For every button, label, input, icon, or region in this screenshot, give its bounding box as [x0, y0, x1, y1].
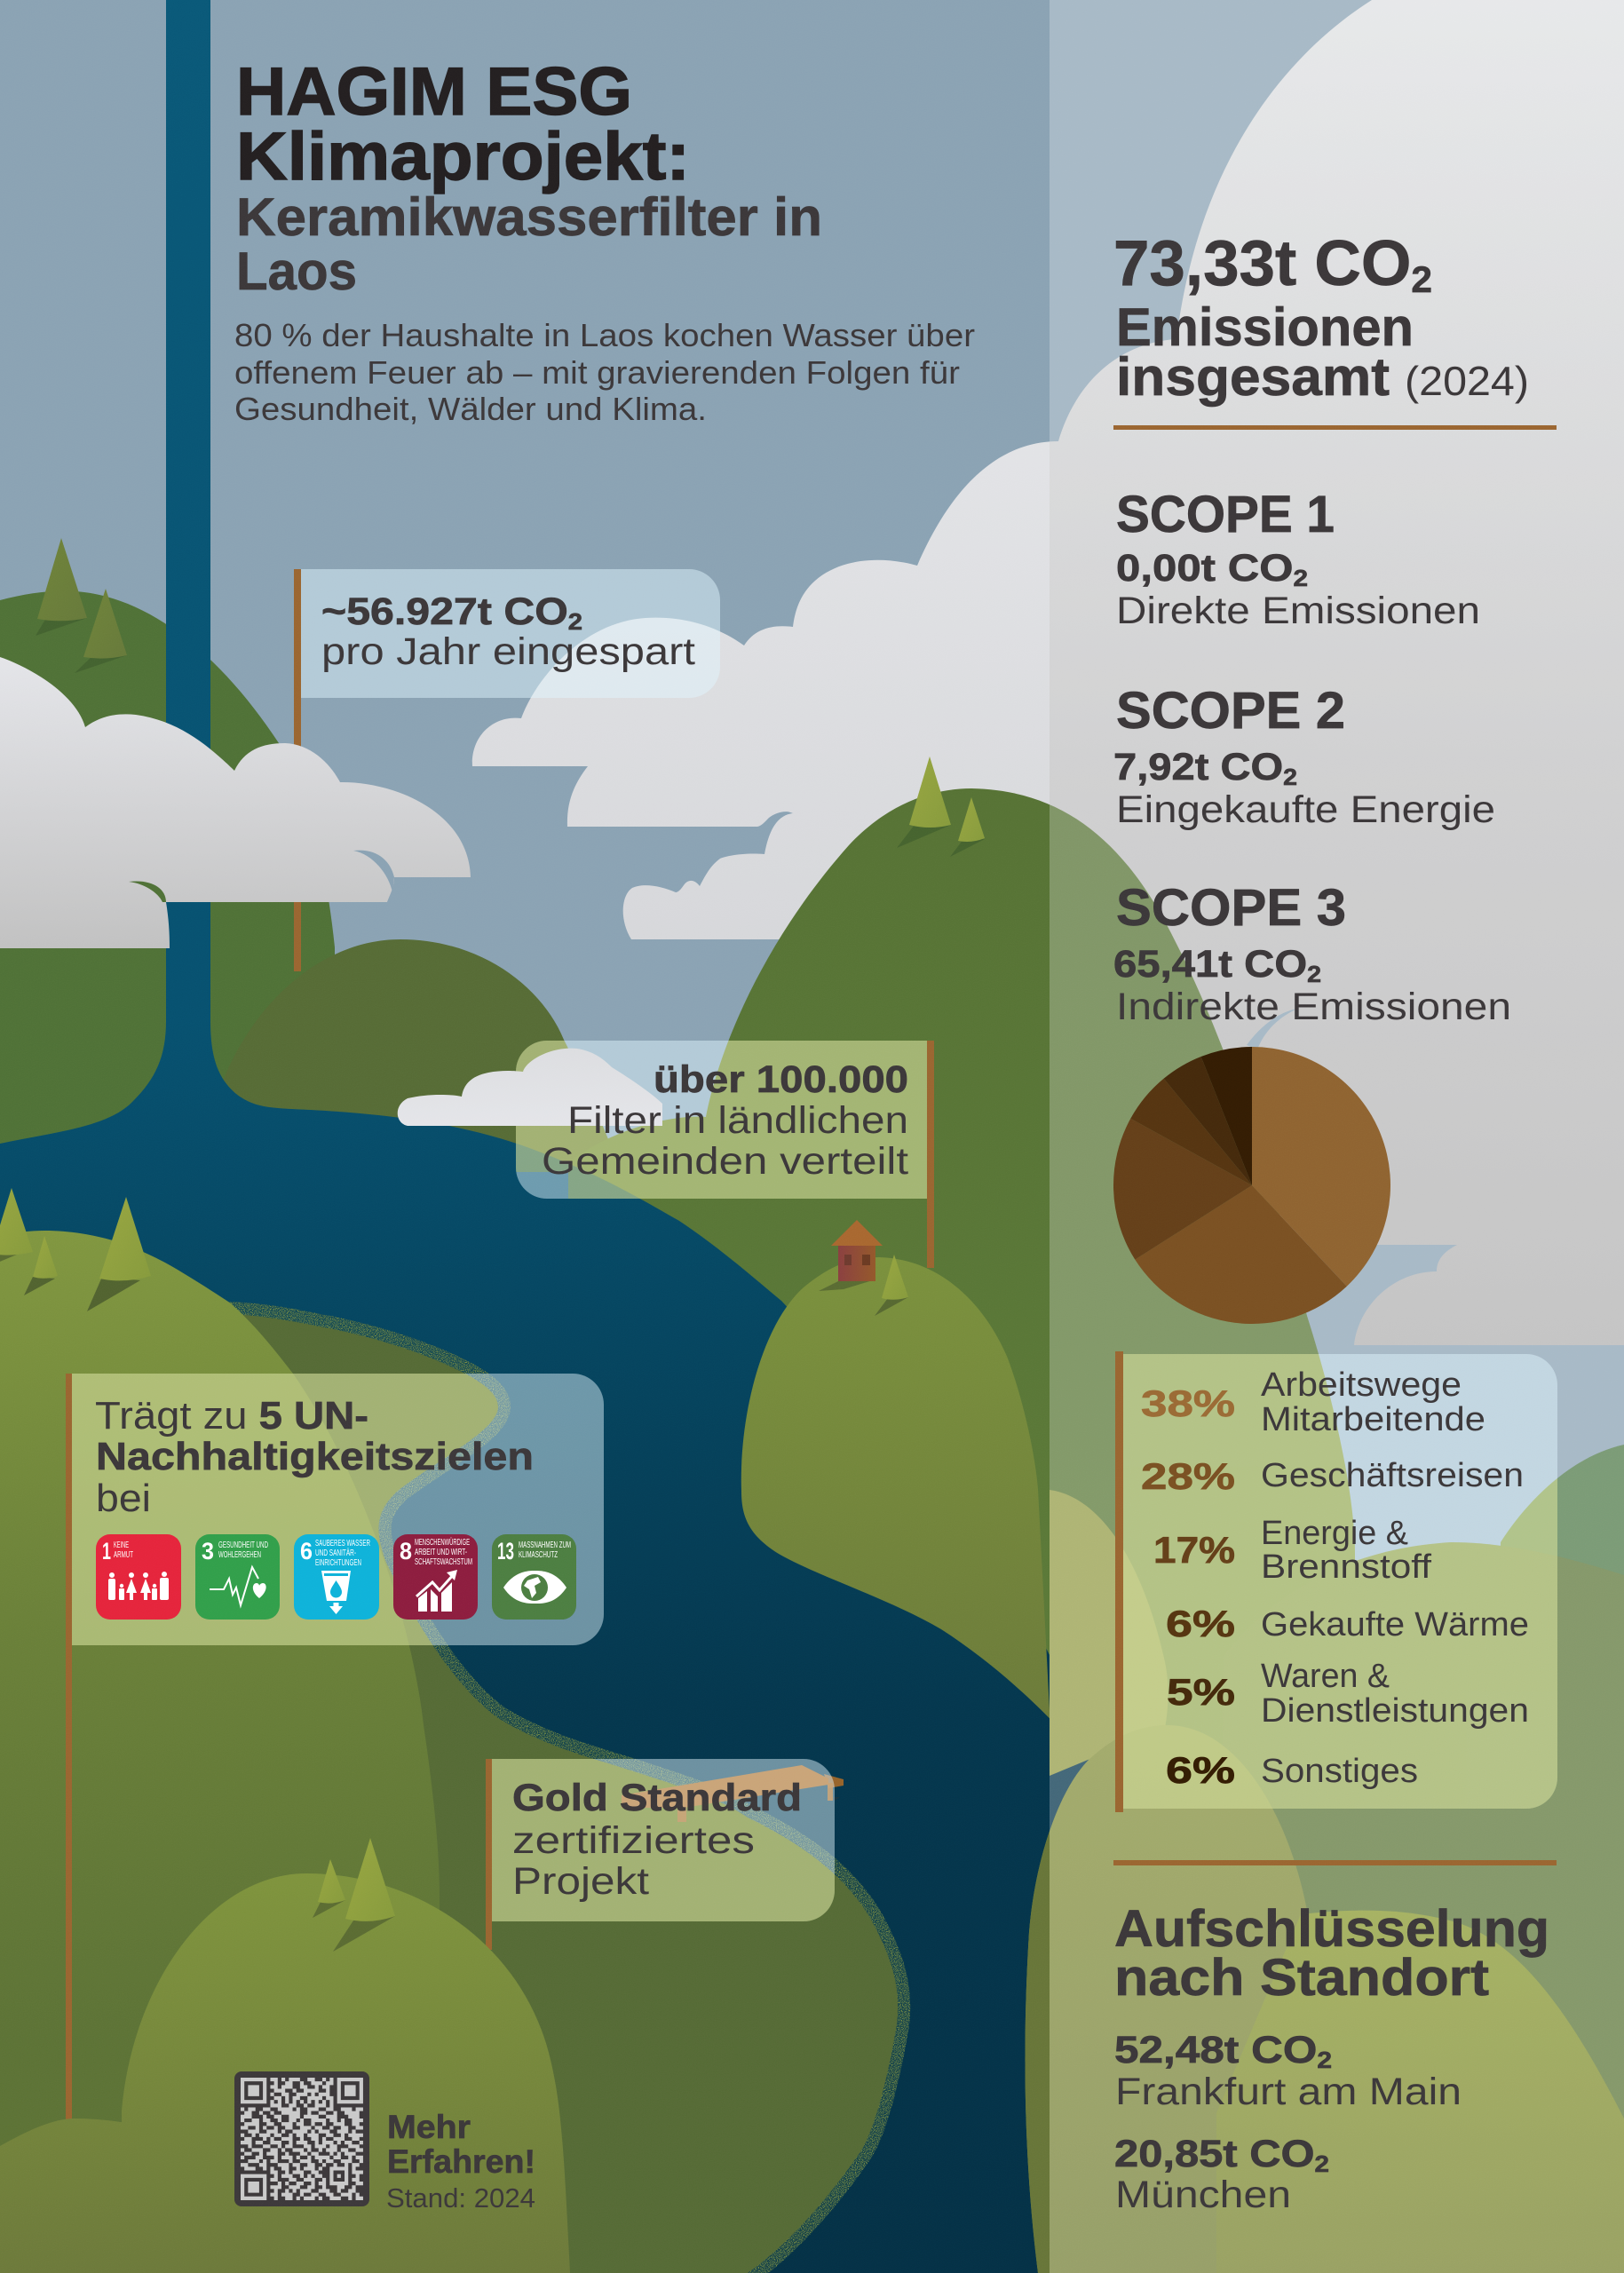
icon: SDG 6: SAUBERES WASSER	[315, 1539, 370, 1548]
title block: Laos	[236, 242, 357, 301]
title block: HAGIM ESG	[236, 54, 632, 130]
breakdown by location: nach Standort	[1114, 1949, 1489, 2007]
river	[0, 1021, 1101, 2273]
breakdown by location: Frankfurt am Main	[1115, 2071, 1462, 2113]
icon: SDG 3: GESUNDHEIT UND	[218, 1540, 268, 1550]
scope 3: 65,41t CO	[1113, 943, 1289, 986]
panel: scope 3 breakdown: Gekaufte Wärme	[1261, 1606, 1529, 1643]
panel: filters distributed: Filter in ländlichen	[567, 1099, 908, 1142]
panel: UN goals: Nachhaltigkeitszielen	[96, 1435, 534, 1478]
scope 3: 2	[1307, 961, 1321, 987]
panel: scope 3 breakdown: Dienstleistungen	[1261, 1692, 1529, 1730]
scope 2: Eingekaufte Energie	[1116, 788, 1495, 831]
bright hill bottom right	[1216, 1911, 1624, 2273]
right column overlay	[1050, 0, 1624, 2273]
lower left hill	[0, 2119, 178, 2273]
icon: SDG 3: 3	[202, 1538, 214, 1564]
icon: SDG 8	[393, 1534, 478, 1620]
intro text: 80 % der Haushalte in Laos kochen Wasser über	[234, 317, 975, 353]
panel: scope 3 breakdown: 38%	[1141, 1382, 1235, 1424]
icon: SDG 13	[492, 1534, 576, 1620]
trees on big hill	[897, 756, 985, 857]
icon: house	[819, 1220, 883, 1291]
panel: gold standard	[492, 1759, 835, 1921]
panel: scope 3 breakdown: Sonstiges	[1261, 1753, 1418, 1790]
scope 1	[1116, 486, 1480, 632]
panel: scope 3 breakdown: 17%	[1153, 1529, 1235, 1571]
panel: scope 3 breakdown: Waren &	[1261, 1658, 1390, 1695]
icon: SDG 8: 8	[400, 1538, 412, 1564]
tree near house	[875, 1255, 908, 1316]
tree on back hill	[36, 538, 127, 673]
title block: Keramikwasserfilter in	[236, 187, 822, 247]
small cloud	[398, 1049, 662, 1126]
breakdown by location: Aufschlüsselung	[1114, 1900, 1549, 1958]
scope 3	[1113, 879, 1511, 1028]
icon: SDG 8: SCHAFTSWACHSTUM	[415, 1557, 472, 1567]
yellow hill right	[1050, 1490, 1168, 1776]
bottom hill	[122, 1873, 570, 2273]
panel: scope 3 breakdown: 28%	[1141, 1455, 1235, 1497]
panel: filters distributed: Gemeinden verteilt	[542, 1140, 908, 1183]
icon: SDG 6: 6	[300, 1538, 313, 1564]
river island hill	[0, 1314, 898, 2273]
total emissions: 73,33t CO	[1113, 228, 1408, 299]
intro text: Gesundheit, Wälder und Klima.	[234, 391, 707, 427]
panel: CO2 saving	[301, 569, 720, 698]
scope 2: 7,92t CO	[1113, 746, 1268, 788]
big hill right	[568, 788, 1355, 1776]
icon: SDG 3	[195, 1534, 280, 1620]
scope 1: SCOPE 1	[1116, 486, 1335, 543]
icon: SDG 1: ARMUT	[114, 1550, 133, 1560]
icon: SDG 13: 13	[497, 1538, 514, 1564]
text: more info: Stand: 2024	[386, 2182, 535, 2214]
flag pole two	[927, 1041, 934, 1268]
title block	[236, 54, 822, 301]
flag pole three	[66, 1374, 72, 2119]
total emissions: insgesamt	[1116, 347, 1390, 407]
trees on bottom hill	[313, 1838, 395, 1952]
pie chart	[1113, 1047, 1390, 1324]
left cloud	[0, 657, 471, 948]
breakdown by location: 2	[1317, 2047, 1332, 2073]
panel: CO2 saving: pro Jahr eingespart	[321, 630, 695, 673]
scope 2: SCOPE 2	[1116, 682, 1345, 740]
intro text	[234, 317, 975, 427]
trees on left front hill	[0, 1188, 151, 1311]
panel: scope 3 breakdown: Energie &	[1261, 1515, 1408, 1552]
icon: SDG 13: MASSNAHMEN ZUM	[519, 1540, 571, 1550]
panel: filters distributed: über 100.000	[654, 1058, 908, 1101]
icon: SDG 3: WOHLERGEHEN	[218, 1550, 261, 1560]
scope 1: Direkte Emissionen	[1116, 590, 1480, 632]
panel: scope 3 breakdown: Brennstoff	[1261, 1548, 1431, 1586]
far right hill	[1501, 1445, 1624, 1598]
panel: scope 3 breakdown: Geschäftsreisen	[1261, 1457, 1524, 1494]
panel: filters distributed	[398, 1041, 927, 1199]
front hill right	[1025, 1725, 1314, 2273]
panel: UN goals	[72, 1374, 604, 1645]
icon: SDG 6	[294, 1534, 379, 1620]
text: more info	[386, 2109, 535, 2214]
back hill left	[0, 590, 335, 1144]
icon: SDG 8: ARBEIT UND WIRT-	[415, 1548, 467, 1557]
panel: scope 3 breakdown	[568, 788, 1624, 2273]
panel: scope 3 breakdown: 6%	[1166, 1603, 1235, 1644]
icon: SDG 6: UND SANITÄR-	[315, 1548, 356, 1558]
sky crescent in cloud	[1247, 1009, 1297, 1049]
breakdown by location: 52,48t CO	[1114, 2029, 1290, 2071]
total emissions: Emissionen	[1116, 297, 1414, 357]
text: more info: Erfahren!	[387, 2143, 535, 2180]
panel: CO2 saving: ~56.927t CO	[321, 590, 541, 633]
scope 1: 2	[1293, 565, 1308, 591]
breakdown by location: 20,85t CO	[1114, 2133, 1290, 2175]
bridge end	[824, 1774, 844, 1801]
panel: CO2 saving: 2	[568, 608, 582, 635]
panel: UN goals: bei	[96, 1477, 151, 1520]
icon: SDG 6: EINRICHTUNGEN	[315, 1558, 361, 1568]
breakdown by location: München	[1115, 2174, 1291, 2216]
panel: gold standard: Gold Standard	[512, 1777, 802, 1819]
icon: SDG 8: MENSCHENWÜRDIGE	[415, 1537, 470, 1548]
bridge plank	[622, 1765, 833, 1822]
waterfall	[166, 0, 210, 1065]
flag pole one	[294, 569, 301, 971]
mid hill behind river	[204, 939, 622, 1172]
breakdown by location	[1114, 1900, 1549, 2216]
icon: SDG 1	[96, 1534, 181, 1620]
total emissions: (2024)	[1405, 358, 1529, 404]
QR code	[234, 2071, 369, 2206]
scope 1: 0,00t CO	[1116, 547, 1271, 590]
text: more info: Mehr	[387, 2109, 471, 2145]
panel: scope 3 breakdown: Arbeitswege	[1261, 1366, 1462, 1404]
river bank halo	[0, 1314, 898, 2273]
total emissions	[1113, 228, 1529, 407]
scope 2	[1113, 682, 1495, 831]
breakdown by location: 2	[1315, 2150, 1329, 2177]
total emissions: 2	[1411, 258, 1432, 300]
hill behind panel right	[1216, 1542, 1624, 2273]
title block: Klimaprojekt:	[236, 119, 690, 194]
panel: scope 3 breakdown: Mitarbeitende	[1261, 1401, 1485, 1438]
icon: SDG 1: KEINE	[114, 1540, 129, 1550]
panel: gold standard: zertifiziertes	[512, 1819, 755, 1862]
intro text: offenem Feuer ab – mit gravierenden Folgen für	[234, 354, 960, 391]
panel: scope 3 breakdown: 5%	[1167, 1671, 1235, 1713]
icon: SDG 1: 1	[102, 1538, 111, 1564]
scope 2: 2	[1283, 764, 1297, 790]
hill with house	[741, 1257, 1088, 1761]
panel: gold standard: Projekt	[512, 1860, 649, 1903]
scope 3: Indirekte Emissionen	[1116, 986, 1511, 1028]
big cloud right	[472, 0, 1624, 1345]
panel: UN goals: Trägt zu 5 UN-	[95, 1394, 368, 1437]
flag pole four	[486, 1759, 492, 1950]
panel: scope 3 breakdown: 6%	[1166, 1749, 1235, 1791]
left front hill	[0, 1231, 440, 2273]
scope 3: SCOPE 3	[1116, 879, 1346, 937]
icon: SDG 13: KLIMASCHUTZ	[519, 1550, 558, 1560]
